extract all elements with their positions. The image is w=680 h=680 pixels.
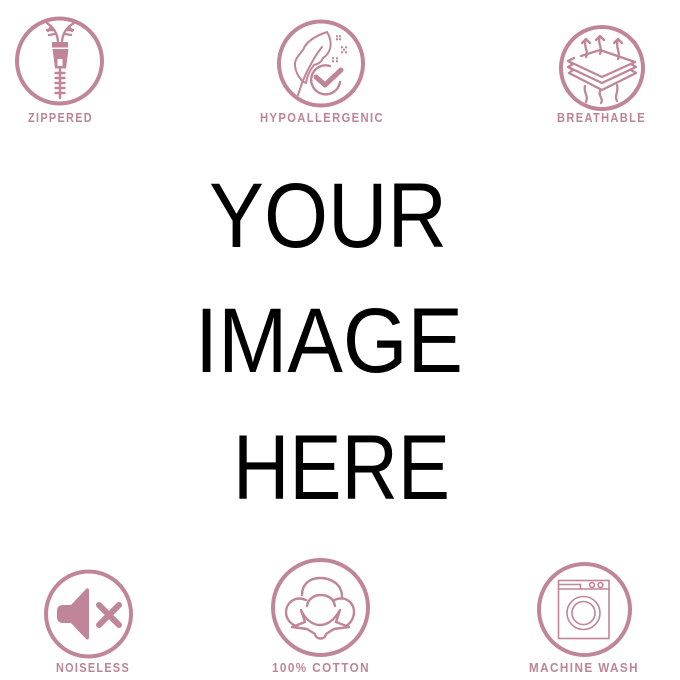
label: zippered: ZIPPERED: [28, 110, 93, 125]
placeholder heading: [195, 165, 463, 519]
badge: breathable: [557, 27, 646, 125]
label: machine wash: MACHINE WASH: [529, 660, 639, 675]
label: hypoallergenic: HYPOALLERGENIC: [260, 110, 384, 125]
placeholder heading: YOUR: [209, 165, 447, 267]
label: 100% cotton: 100% COTTON: [272, 660, 370, 675]
placeholder heading: HERE: [233, 417, 450, 519]
icon: zipper: [17, 18, 102, 104]
badge: zippered: [17, 18, 102, 125]
placeholder heading: IMAGE: [195, 290, 463, 392]
badge: machine wash: [529, 564, 639, 675]
icon: cotton boll: [273, 560, 368, 655]
badge: hypoallergenic: [260, 22, 384, 125]
label: breathable: BREATHABLE: [557, 110, 646, 125]
badge: noiseless: [46, 572, 131, 675]
label: noiseless: NOISELESS: [56, 660, 130, 675]
icon: breathable layers: [561, 27, 643, 109]
icon: muted speaker: [46, 572, 131, 656]
badge: 100% cotton: [272, 560, 370, 675]
icon: feather with check: [279, 22, 363, 106]
icon: washing machine: [539, 564, 630, 655]
